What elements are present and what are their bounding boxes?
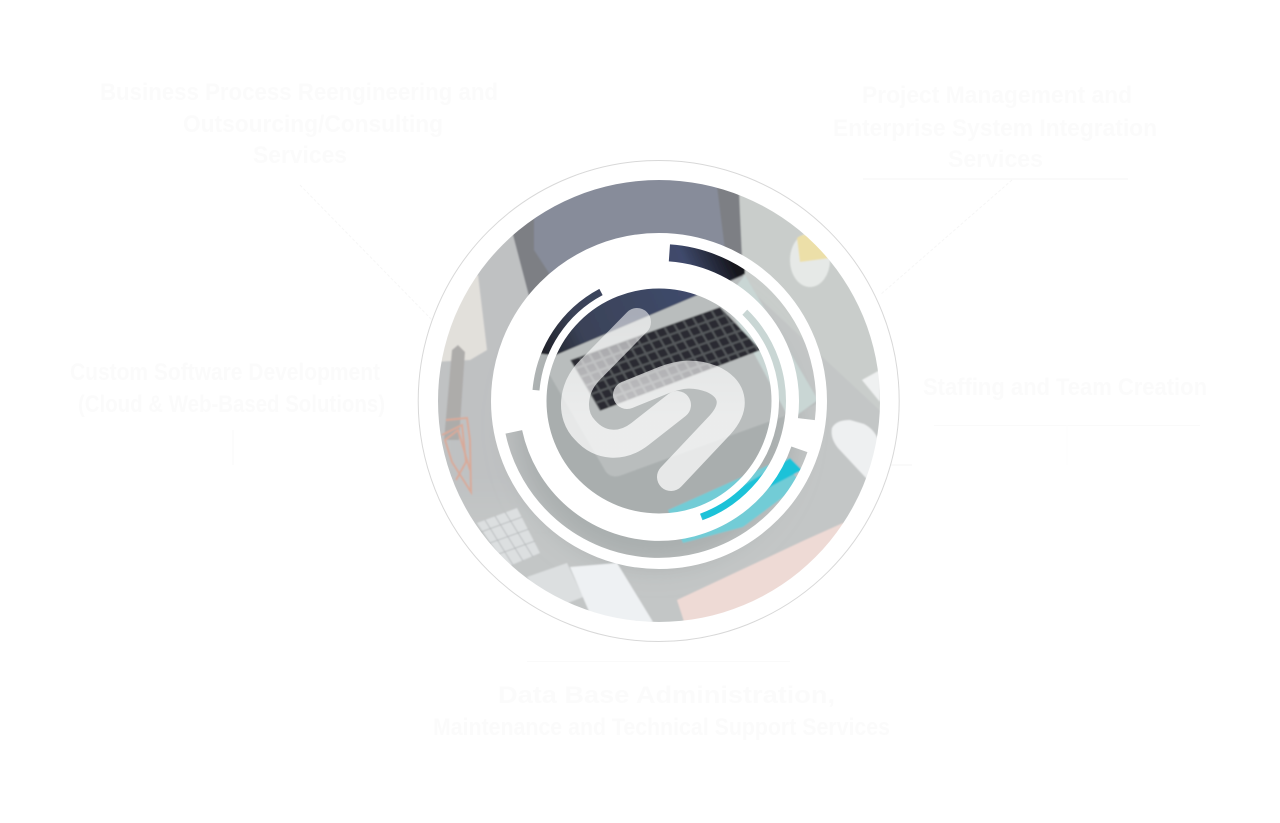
grid notepad xyxy=(477,508,540,567)
laptop screen xyxy=(541,244,746,356)
text: business process services xyxy=(100,79,498,169)
darker desk area xyxy=(512,354,800,570)
infographic xyxy=(300,160,1128,642)
text: project management services: Services xyxy=(948,146,1043,173)
keyboard xyxy=(570,307,761,411)
text: project management services: Enterprise System Integration xyxy=(833,115,1157,142)
connector lines xyxy=(233,179,1200,662)
photo: desk scene xyxy=(430,170,890,640)
text: data base administration: Maintenance and Technical Support Services xyxy=(433,714,890,741)
white paper xyxy=(570,562,653,622)
text: business process services: Services xyxy=(253,142,347,169)
text: custom software development xyxy=(70,359,385,418)
text: data base administration xyxy=(433,682,890,741)
glass with lemon xyxy=(790,233,830,287)
laptop base xyxy=(550,276,785,476)
text: project management services: Project Management and xyxy=(862,82,1132,109)
white ring with cut-out arcs xyxy=(491,233,827,569)
tablet xyxy=(512,188,744,296)
logo xyxy=(575,322,731,477)
text: business process services: Outsourcing/Consulting xyxy=(183,111,443,138)
rose gold clips xyxy=(442,418,471,492)
text: business process services: Business Process Reengineering and xyxy=(100,79,498,106)
text: custom software development: (Cloud & Web-Based Solutions) xyxy=(78,391,385,418)
text: custom software development: Custom Software Development xyxy=(70,359,380,386)
mouse xyxy=(831,420,877,478)
pencil xyxy=(444,345,465,440)
pink notebook xyxy=(676,522,843,620)
mug xyxy=(442,275,488,362)
text: data base administration: Data Base Administration, xyxy=(498,682,835,709)
small white paper xyxy=(862,370,880,402)
text: project management services xyxy=(833,82,1157,173)
text: staffing and team creation: Staffing and Team Creation xyxy=(923,374,1207,401)
outer thin circle xyxy=(418,160,899,642)
left desk xyxy=(430,170,560,500)
cyan ruler xyxy=(668,460,802,543)
top right desk xyxy=(740,170,890,420)
